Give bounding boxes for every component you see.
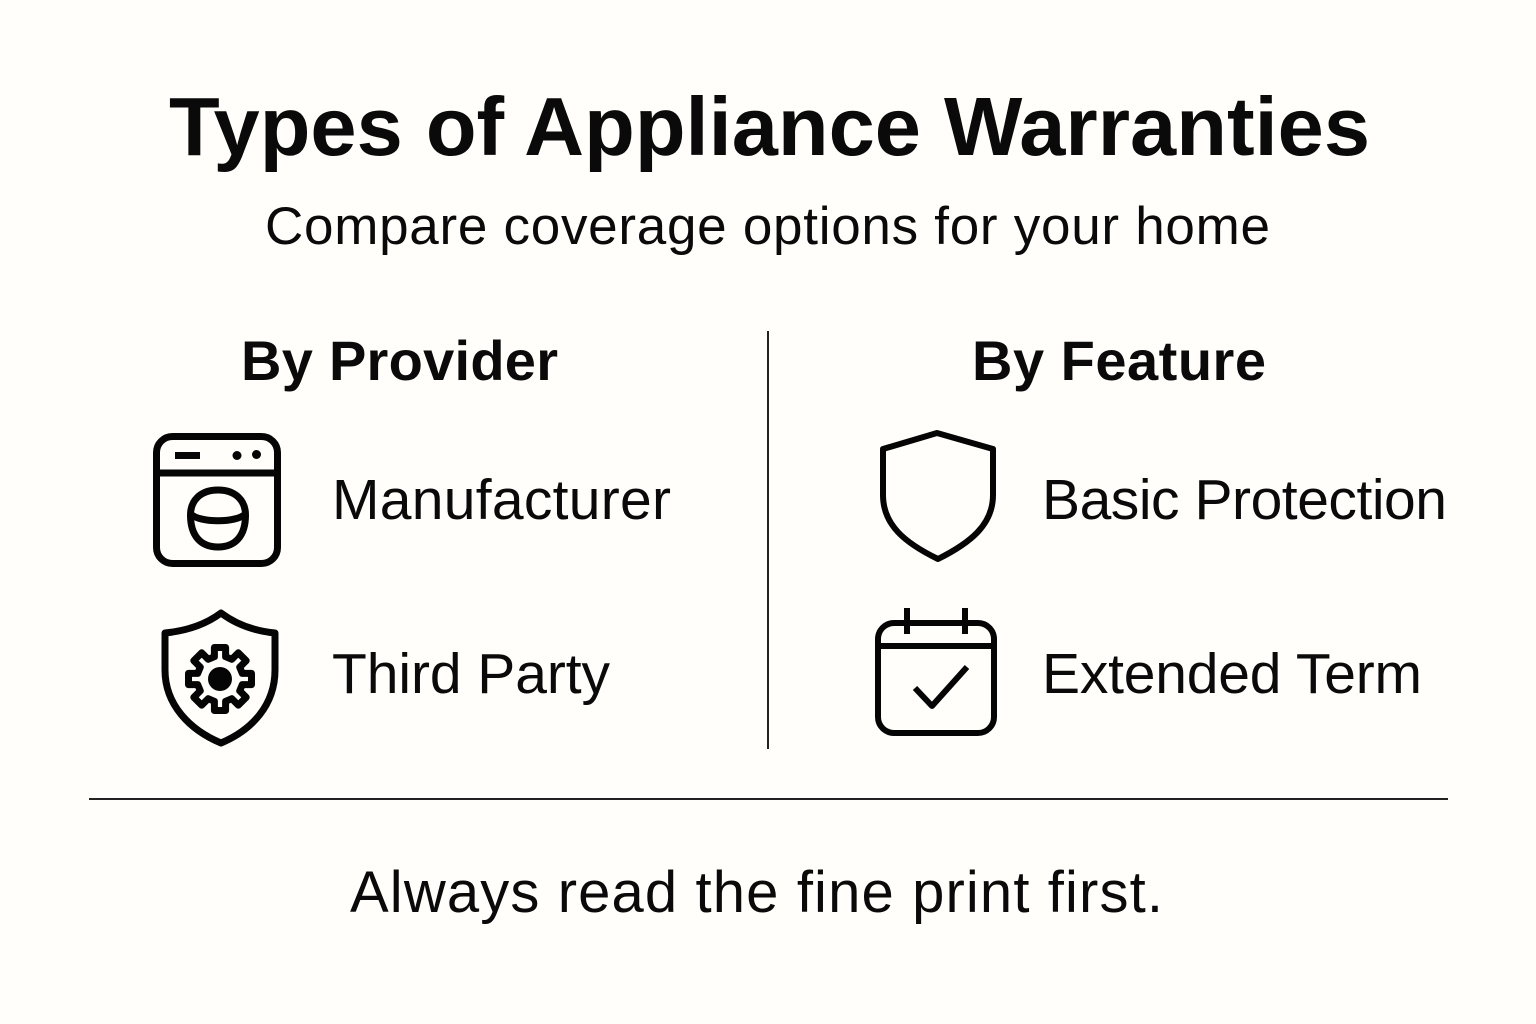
heading: by feature: By Feature <box>972 329 1266 392</box>
footer note: Always read the fine print first. <box>350 860 1163 925</box>
heading: by provider: By Provider <box>241 329 558 392</box>
label: basic protection: Basic Protection <box>1042 468 1447 532</box>
label: third party: Third Party <box>332 642 610 706</box>
column divider <box>767 331 769 749</box>
footer divider <box>89 798 1448 800</box>
icon: shield <box>883 433 993 559</box>
panel: by feature <box>878 329 1447 733</box>
icon: washing machine <box>156 436 278 564</box>
icon: shield with gear <box>165 613 275 743</box>
panel: by provider <box>156 329 671 743</box>
title: Types of Appliance Warranties <box>169 80 1370 173</box>
label: extended term: Extended Term <box>1042 642 1422 706</box>
label: manufacturer: Manufacturer <box>332 468 671 532</box>
icon: calendar with check <box>878 608 994 733</box>
subtitle: Compare coverage options for your home <box>265 197 1270 256</box>
